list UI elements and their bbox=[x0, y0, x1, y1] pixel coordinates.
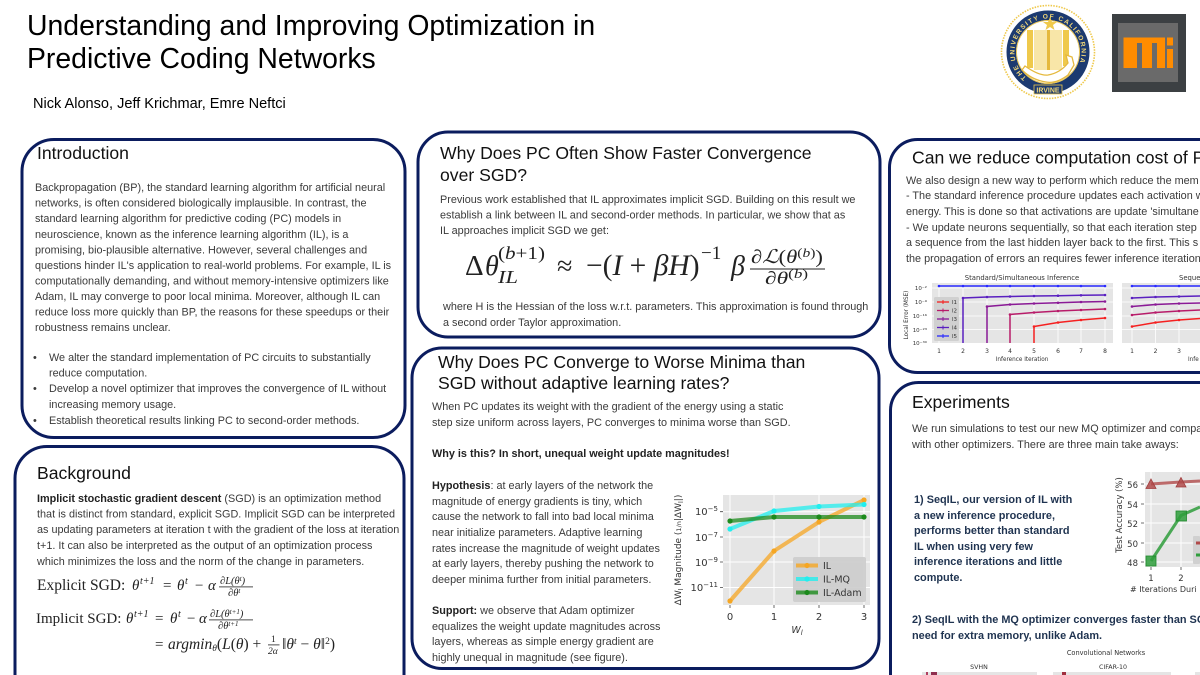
chart: standard simultaneous inference: Inference Iteration bbox=[996, 357, 1049, 363]
chart: standard simultaneous inference: 6 bbox=[1056, 348, 1060, 355]
implicit SGD equation: L(θ) + bbox=[222, 636, 261, 653]
IL update equation: (b) bbox=[797, 245, 815, 260]
takeaway 1 bbox=[914, 494, 1072, 584]
explicit SGD equation: Explicit SGD: bbox=[37, 577, 125, 594]
line chart: weight update magnitude: 2 bbox=[816, 612, 822, 623]
support text: layers, whereas as simple energy gradient are bbox=[432, 636, 654, 648]
contribution bullets: • bbox=[33, 352, 37, 364]
explicit SGD equation bbox=[37, 575, 253, 599]
chart: standard simultaneous inference: 10⁻² bbox=[915, 285, 927, 292]
chart: sequential inference: 3 bbox=[1177, 348, 1181, 355]
explicit SGD equation: θ bbox=[132, 578, 140, 594]
contribution bullets bbox=[33, 352, 386, 427]
chart legend: IL bbox=[823, 561, 832, 572]
line chart: weight update magnitude: 10 bbox=[690, 583, 703, 594]
chart: standard simultaneous inference: Local Error (MSE) bbox=[904, 291, 910, 339]
contribution bullets: Establish theoretical results linking PC to second-order methods. bbox=[49, 415, 359, 427]
chart: standard simultaneous inference: 10⁻⁹ bbox=[915, 299, 927, 306]
takeaway 2: 2) SeqIL with the MQ optimizer converges faster than SC bbox=[912, 614, 1200, 626]
support text: equalizes the weight update magnitudes across bbox=[432, 621, 661, 633]
line chart: weight update magnitude: 1/n|ΔW bbox=[674, 503, 684, 532]
takeaway 1: inference iterations and little bbox=[914, 556, 1062, 568]
implicit SGD equation: θ bbox=[212, 644, 217, 654]
introduction paragraph: robustness remains unclear. bbox=[35, 322, 171, 334]
logo: UC Irvine seal: THE UNIVERSITY OF CALIFORNIA bbox=[1010, 14, 1086, 82]
heading: why faster convergence bbox=[440, 143, 812, 185]
chart: standard simultaneous inference: 1 bbox=[937, 348, 941, 355]
heading: reduce computation: Can we reduce computation cost of P bbox=[912, 148, 1200, 168]
implicit SGD equation: − bbox=[297, 636, 313, 653]
line chart: weight update magnitude: W bbox=[791, 625, 801, 636]
explicit SGD equation: θ bbox=[177, 578, 185, 594]
Hessian note: a second order Taylor approximation. bbox=[443, 317, 621, 329]
introduction paragraph: Adam, IL may converge to poor local minima. Moreover, although IL can bbox=[35, 291, 380, 303]
chart: test accuracy: 2 bbox=[1178, 574, 1184, 584]
heading: why faster convergence: over SGD? bbox=[440, 165, 527, 185]
hypothesis text: at early layers, thereby pushing the network to bbox=[432, 558, 654, 570]
implicit SGD equation: = bbox=[155, 611, 163, 627]
implicit SGD equation: θ‖ bbox=[313, 636, 325, 653]
convergence paragraph bbox=[440, 194, 855, 237]
chart: standard simultaneous inference: Standard/Simultaneous Inference bbox=[965, 274, 1079, 282]
chart: sequential inference: Seque bbox=[1179, 274, 1200, 282]
introduction paragraph: promising, bio-plausible alternative. However, several challenges and bbox=[35, 244, 367, 256]
line chart: weight update magnitude: |) bbox=[674, 495, 684, 501]
chart: test accuracy: 54 bbox=[1127, 501, 1138, 511]
chart: standard simultaneous inference: 10⁻²³ bbox=[913, 327, 927, 334]
hypothesis text: magnitude of energy gradients is tiny, which bbox=[432, 496, 642, 508]
implicit SGD equation bbox=[36, 608, 335, 657]
chart: standard simultaneous inference: 10⁻³⁰ bbox=[913, 340, 928, 347]
background paragraph: as updating parameters at iteration t with the gradient of the loss at iteration bbox=[37, 524, 399, 536]
hypothesis text: Hypothesis: at early layers of the network the bbox=[432, 480, 653, 492]
computation text: a sequence from the last hidden layer back to the first. This s bbox=[906, 237, 1199, 249]
implicit SGD equation: t bbox=[294, 637, 297, 647]
chart legend: layers: l3 bbox=[952, 317, 958, 323]
implicit SGD equation: ‖θ bbox=[282, 636, 294, 653]
IL update equation: β bbox=[730, 251, 745, 282]
hypothesis text: cause the network to fall into bad local minima bbox=[432, 511, 655, 523]
logo: UC Irvine seal bbox=[1000, 4, 1096, 100]
support text bbox=[432, 605, 661, 664]
chart legend: layers: l5 bbox=[952, 334, 958, 340]
line chart: weight update magnitude bbox=[674, 495, 870, 637]
line chart: weight update magnitude: −11 bbox=[703, 581, 718, 589]
implicit SGD equation: t+1 bbox=[230, 608, 240, 616]
IL update equation: Δ bbox=[465, 250, 484, 282]
support text: highly unequal in magnitude (see figure). bbox=[432, 652, 628, 664]
introduction paragraph: reduce loss more quickly than BP, the reasons for these speedups or their bbox=[35, 306, 390, 318]
chart: standard simultaneous inference: 3 bbox=[985, 348, 989, 355]
computation text: the propagation of errors an requires fewer inference iteration bbox=[906, 253, 1200, 265]
chart legend: layers: l1 bbox=[952, 300, 957, 306]
convergence paragraph: establish a link between IL and second-order methods. In particular, we show that as bbox=[440, 210, 846, 222]
convolutional network charts: Convolutional Networks bbox=[1067, 649, 1146, 657]
chart: test accuracy: 52 bbox=[1127, 520, 1138, 530]
IL update equation: −(I + βH) bbox=[586, 250, 700, 282]
implicit SGD equation: θ bbox=[170, 611, 178, 627]
explicit SGD equation: t bbox=[185, 576, 188, 587]
panel: reduce computation bbox=[890, 140, 1200, 372]
chart: standard simultaneous inference: 2 bbox=[961, 348, 965, 355]
IL update equation: ∂θ bbox=[765, 268, 783, 288]
chart: standard simultaneous inference: 10⁻¹⁶ bbox=[913, 313, 928, 320]
panel: introduction bbox=[22, 140, 405, 438]
chart legend: IL-Adam bbox=[823, 588, 862, 599]
takeaway 1: IL when using very few bbox=[914, 541, 1034, 553]
heading: why worse minima: SGD without adaptive learning rates? bbox=[438, 373, 730, 393]
minima intro: When PC updates its weight with the gradient of the energy using a static bbox=[432, 401, 784, 413]
implicit SGD equation: t bbox=[178, 609, 181, 620]
IL update equation: ∂ℒ(θ bbox=[751, 247, 795, 268]
takeaway 1: 1) SeqIL, our version of IL with bbox=[914, 494, 1072, 506]
chart legend: layers bbox=[934, 297, 959, 341]
hypothesis text: deeper minima further from initial parameters. bbox=[432, 574, 651, 586]
hypothesis text: near initialize parameters. Adaptive learning bbox=[432, 527, 642, 539]
experiments intro: We run simulations to test our new MQ optimizer and compa bbox=[912, 423, 1200, 435]
introduction paragraph: standard learning algorithm for predictive coding (PC) models in bbox=[35, 213, 341, 225]
chart: standard simultaneous inference bbox=[904, 274, 1113, 363]
IL update equation: (b+1) bbox=[498, 243, 545, 264]
Hessian note: where H is the Hessian of the loss w.r.t. parameters. This approximation is found through bbox=[442, 301, 868, 313]
explicit SGD equation: ) bbox=[241, 576, 246, 587]
chart: test accuracy bbox=[1115, 472, 1200, 594]
convolutional network charts: CIFAR-10 bbox=[1099, 664, 1127, 671]
explicit SGD equation: t bbox=[240, 575, 243, 583]
chart: test accuracy: 50 bbox=[1127, 540, 1138, 550]
line chart: weight update magnitude: 10 bbox=[695, 558, 708, 569]
chart: test accuracy: 56 bbox=[1127, 481, 1138, 491]
implicit SGD equation: argmin bbox=[168, 636, 212, 653]
chart legend: IL-MQ bbox=[823, 574, 850, 586]
panel: why faster convergence bbox=[418, 132, 880, 337]
logo: UC Irvine seal: IRVINE bbox=[1036, 87, 1060, 94]
contribution bullets: We alter the standard implementation of PC circuits to substantially bbox=[49, 352, 371, 364]
explicit SGD equation: = bbox=[163, 578, 171, 594]
authors: Nick Alonso, Jeff Krichmar, Emre Neftci bbox=[33, 96, 286, 112]
panel: experiments bbox=[890, 382, 1200, 675]
explicit SGD equation: α bbox=[208, 578, 217, 594]
line chart: weight update magnitude: 3 bbox=[861, 612, 867, 623]
chart: sequential inference: Infe bbox=[1188, 357, 1199, 363]
computation text bbox=[906, 175, 1200, 265]
line chart: weight update magnitude: ΔW bbox=[674, 590, 684, 605]
convolutional network charts: SVHN bbox=[970, 664, 988, 671]
implicit SGD equation: 2 bbox=[325, 637, 330, 647]
explicit SGD equation: ∂L(θ bbox=[220, 576, 240, 587]
implicit SGD equation: t+1 bbox=[134, 609, 149, 620]
chart: standard simultaneous inference: 7 bbox=[1079, 348, 1083, 355]
chart: standard simultaneous inference: 5 bbox=[1032, 348, 1036, 355]
explicit SGD equation: t bbox=[238, 587, 241, 595]
line chart: weight update magnitude: 1 bbox=[771, 612, 777, 623]
introduction paragraph: Backpropagation (BP), the standard learning algorithm for artificial neural bbox=[35, 182, 385, 194]
heading: background: Background bbox=[37, 463, 131, 483]
line chart: weight update magnitude: l bbox=[677, 588, 685, 590]
background paragraph: that is distinct from standard, explicit SGD. Implicit SGD can be interpreted bbox=[37, 508, 395, 520]
implicit SGD equation: α bbox=[199, 611, 208, 627]
chart: sequential inference: 2 bbox=[1154, 348, 1158, 355]
line chart: weight update magnitude: −7 bbox=[708, 531, 718, 539]
IL update equation: θ bbox=[485, 251, 499, 282]
background paragraph: Implicit stochastic gradient descent (SGD) is an optimization method bbox=[37, 493, 381, 505]
heading: experiments: Experiments bbox=[912, 392, 1010, 412]
heading: why worse minima: Why Does PC Converge to Worse Minima than bbox=[438, 352, 805, 372]
heading: introduction: Introduction bbox=[37, 143, 129, 163]
implicit SGD equation: = bbox=[155, 637, 163, 653]
IL update equation: −1 bbox=[701, 243, 721, 264]
chart: sequential inference bbox=[1122, 274, 1200, 363]
IL update equation: ) bbox=[815, 247, 823, 268]
contribution bullets: Develop a novel optimizer that improves the convergence of IL without bbox=[49, 383, 386, 395]
minima intro bbox=[432, 401, 791, 429]
chart: standard simultaneous inference: 8 bbox=[1103, 348, 1107, 355]
heading: why faster convergence: Why Does PC Often Show Faster Convergence bbox=[440, 143, 812, 163]
explicit SGD equation: − bbox=[195, 578, 203, 594]
IL update equation bbox=[465, 243, 825, 288]
contribution bullets: reduce computation. bbox=[49, 368, 147, 380]
background paragraph bbox=[36, 493, 399, 568]
experiments intro: with other optimizers. There are three main take aways: bbox=[911, 439, 1179, 451]
convergence paragraph: Previous work established that IL approximates implicit SGD. Building on this result we bbox=[440, 194, 855, 206]
introduction paragraph bbox=[35, 182, 392, 334]
background paragraph: which minimizes the loss and the norm of the change in parameters. bbox=[36, 556, 364, 568]
implicit SGD equation: ) bbox=[330, 636, 335, 653]
takeaway 2: need for extra memory, unlike Adam. bbox=[912, 630, 1102, 642]
title: Predictive Coding Networks bbox=[27, 43, 376, 75]
experiments intro bbox=[911, 423, 1200, 451]
implicit SGD equation: ∂θ bbox=[218, 621, 228, 632]
panel: why worse minima bbox=[412, 348, 879, 668]
Hessian note bbox=[442, 301, 868, 329]
takeaway 1: performs better than standard bbox=[914, 525, 1070, 537]
introduction paragraph: questions hinder IL's application to real-world problems. For example, IL is bbox=[35, 260, 392, 272]
implicit SGD equation: ) bbox=[239, 609, 244, 620]
line chart: weight update magnitude: −9 bbox=[708, 556, 718, 564]
IL update equation: IL bbox=[497, 267, 518, 287]
heading: why worse minima bbox=[438, 352, 805, 393]
introduction paragraph: computationally demanding, and without memory-intensive optimizers like bbox=[35, 276, 389, 288]
contribution bullets: • bbox=[33, 415, 37, 427]
introduction paragraph: neuroscience, known as the inference learning algorithm (IL), is a bbox=[35, 229, 349, 241]
convergence paragraph: IL approaches implicit SGD we get: bbox=[440, 225, 609, 237]
explicit SGD equation: t+1 bbox=[140, 576, 155, 587]
implicit SGD equation: θ bbox=[126, 611, 134, 627]
chart: sequential inference: 1 bbox=[1130, 348, 1134, 355]
line chart: weight update magnitude: l bbox=[677, 501, 685, 503]
computation text: - The standard inference procedure updates each activation w bbox=[906, 190, 1200, 202]
implicit SGD equation: ( bbox=[217, 636, 222, 653]
chart: test accuracy: Test Accuracy (%) bbox=[1115, 477, 1125, 554]
chart: standard simultaneous inference: 4 bbox=[1008, 348, 1012, 355]
contribution bullets: • bbox=[33, 383, 37, 395]
title bbox=[27, 10, 595, 75]
minima intro: step size uniform across layers, PC converges to minima worse than SGD. bbox=[432, 417, 791, 429]
implicit SGD equation: − bbox=[187, 611, 195, 627]
takeaway 1: compute. bbox=[914, 572, 962, 584]
hypothesis text bbox=[432, 480, 660, 586]
implicit SGD equation: 1 bbox=[271, 635, 276, 645]
line chart: weight update magnitude: 10 bbox=[695, 533, 708, 544]
chart: test accuracy: 48 bbox=[1127, 559, 1138, 569]
line chart: weight update magnitude: −5 bbox=[708, 505, 718, 513]
hypothesis text: rates increase the magnitude of weight updates bbox=[432, 543, 660, 555]
chart legend: layers: l4 bbox=[952, 326, 958, 332]
line chart: weight update magnitude: Magnitude ( bbox=[674, 532, 684, 588]
implicit SGD equation: 2α bbox=[268, 647, 279, 657]
contribution bullets: increasing memory usage. bbox=[49, 399, 176, 411]
bold question: Why is this? In short, unequal weight update magnitudes! bbox=[432, 448, 730, 460]
computation text: - We update neurons sequentially, so that each iteration step bbox=[906, 222, 1197, 234]
line chart: weight update magnitude: 10 bbox=[695, 507, 708, 518]
logo: MI lab bbox=[1112, 14, 1186, 92]
chart legend: layers: l2 bbox=[952, 308, 957, 314]
IL update equation: ≈ bbox=[557, 251, 572, 282]
implicit SGD equation: t+1 bbox=[228, 620, 239, 628]
support text: Support: we observe that Adam optimizer bbox=[432, 605, 635, 617]
introduction paragraph: networks, is often considered biologically implausible. In contrast, the bbox=[35, 198, 367, 210]
computation text: We also design a new way to perform which reduce the mem bbox=[906, 175, 1199, 187]
background paragraph: t+1. It can also be interpreted as the output of an optimization process bbox=[37, 540, 373, 552]
chart: test accuracy: # Iterations Duri bbox=[1130, 585, 1197, 594]
implicit SGD equation: ∂L(θ bbox=[210, 609, 230, 620]
computation text: energy. This is done so that activations are update 'simultane bbox=[906, 206, 1199, 218]
IL update equation: (b) bbox=[788, 266, 807, 281]
takeaway 1: a new inference procedure, bbox=[914, 510, 1055, 522]
chart legend bbox=[793, 557, 866, 602]
implicit SGD equation: Implicit SGD: bbox=[36, 611, 121, 627]
line chart: weight update magnitude: 0 bbox=[727, 612, 733, 623]
takeaway 2 bbox=[912, 614, 1200, 642]
chart: test accuracy: 1 bbox=[1148, 574, 1154, 584]
explicit SGD equation: ∂θ bbox=[228, 588, 238, 599]
title: Understanding and Improving Optimization in bbox=[27, 10, 595, 42]
line chart: weight update magnitude: l bbox=[801, 629, 803, 637]
convolutional network charts bbox=[922, 649, 1200, 675]
panel: background bbox=[15, 446, 404, 675]
